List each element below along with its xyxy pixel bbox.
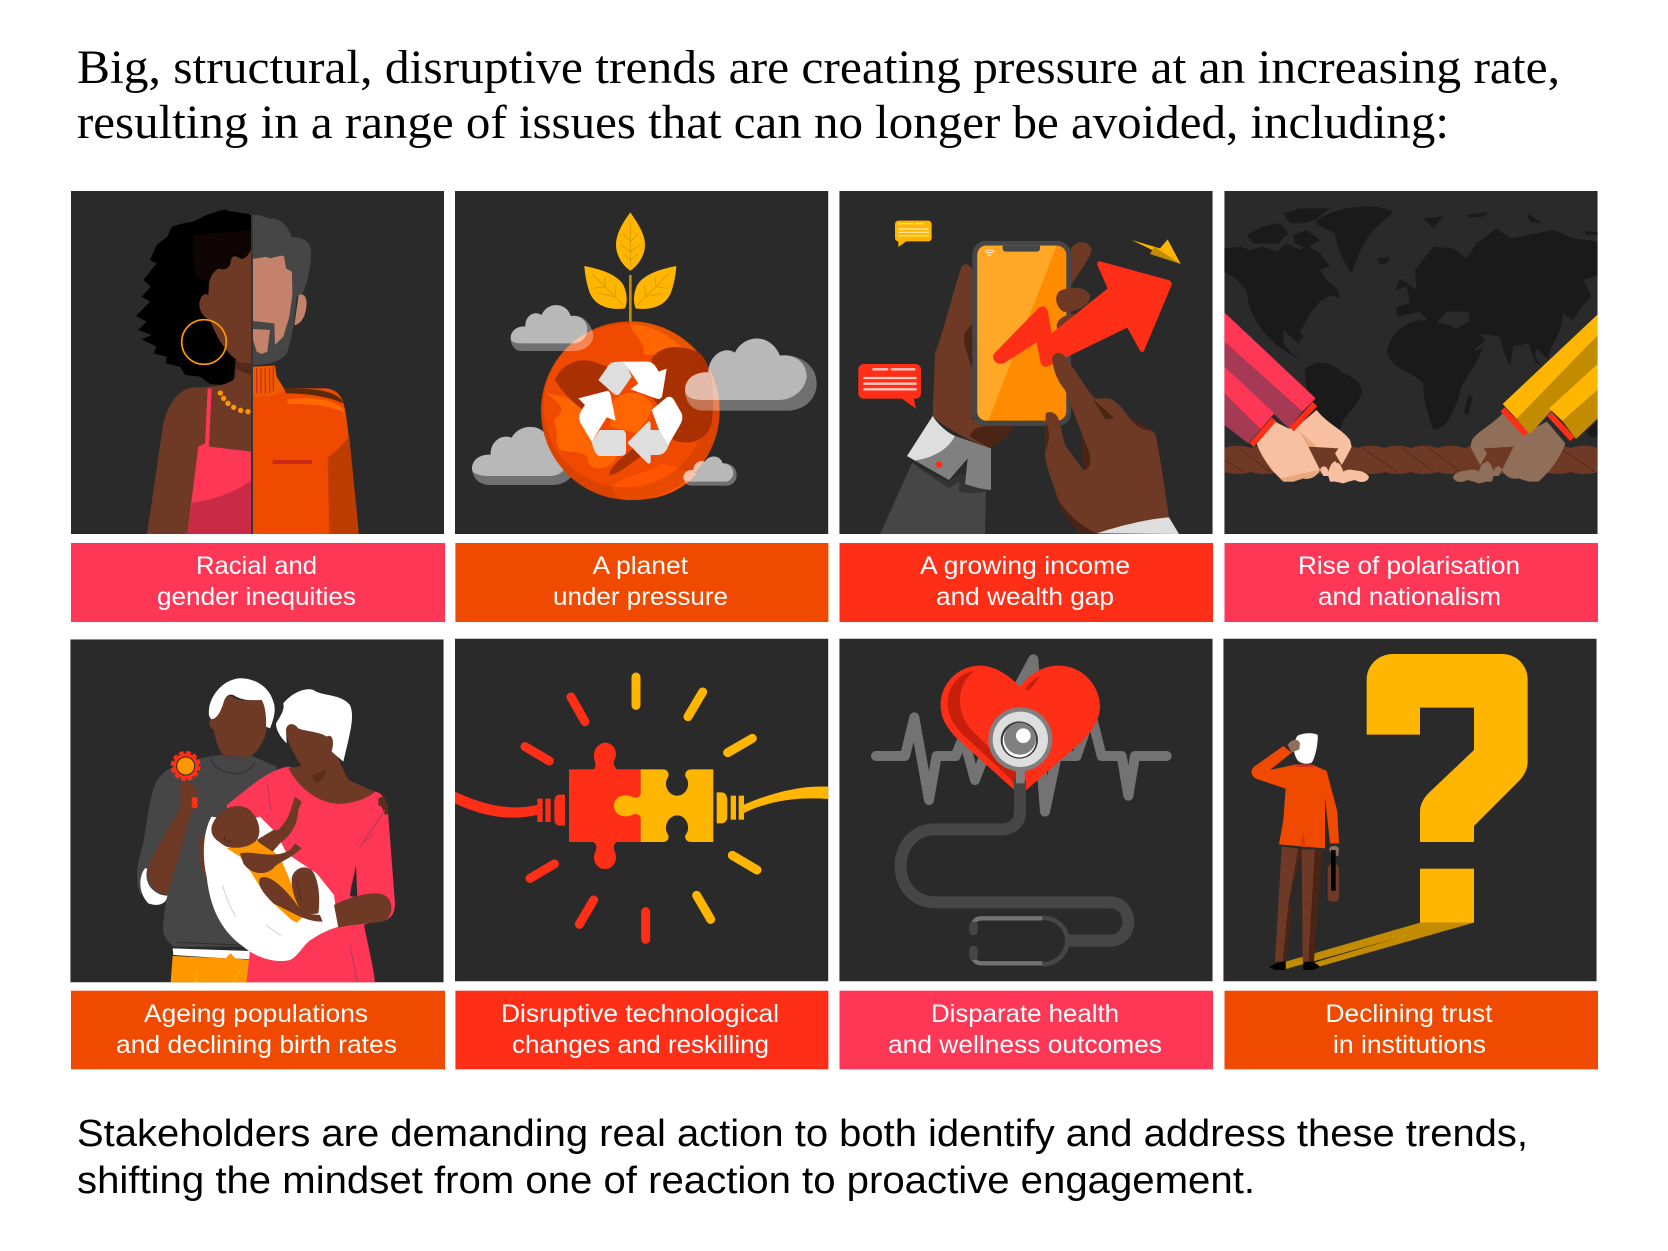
label: disparate health and wellness outcomes <box>840 991 1213 1069</box>
label: a planet under pressure: A planet <box>592 552 688 580</box>
icon: red plug <box>455 792 565 826</box>
label: a planet under pressure <box>455 543 828 622</box>
label: racial and gender inequities <box>71 543 445 622</box>
icon: rising red arrow <box>993 261 1172 367</box>
icon: pink sleeves and left hands <box>1224 312 1369 483</box>
label: ageing populations and declining birth rates <box>71 991 445 1069</box>
icon: heart <box>941 666 1100 791</box>
label: disparate health and wellness outcomes: Disparate health <box>931 1000 1119 1028</box>
icon: shirt cuff and sleeve <box>880 416 991 534</box>
panel: declining trust illustration <box>1223 638 1597 982</box>
icon: yellow puzzle piece <box>614 769 713 842</box>
icon: baby in white wrap <box>204 797 391 961</box>
icon: sprout leaves <box>584 212 676 322</box>
icon: yellow sleeves and right hands <box>1453 314 1598 483</box>
label: a growing income and wealth gap <box>840 543 1213 622</box>
panel: health and wellness illustration <box>839 638 1213 982</box>
label: racial and gender inequities: gender inequities <box>157 583 356 611</box>
label: rise of polarisation and nationalism: and nationalism <box>1318 583 1501 611</box>
icon: question mark <box>1367 654 1528 923</box>
icon: rope <box>1224 446 1598 474</box>
panel: disruptive technology illustration <box>455 638 828 982</box>
icon: cloud lower right <box>683 456 737 486</box>
icon: right hand tapping <box>1045 353 1179 534</box>
icon: man looking up <box>1251 733 1339 970</box>
panel: income and wealth gap illustration <box>839 191 1213 534</box>
icon: stethoscope tube <box>901 770 1128 964</box>
icon: cloud lower left <box>472 427 572 485</box>
icon: woman in pink <box>199 689 395 982</box>
icon: cloud right <box>685 339 817 411</box>
title: Big, structural, disruptive trends are creating pressure at an increasing rate, <box>77 41 1560 94</box>
icon: fingers behind arrow <box>1056 288 1090 330</box>
title <box>77 41 1560 149</box>
label: disruptive technological changes and reskilling: Disruptive technological <box>501 1000 779 1028</box>
label: ageing populations and declining birth rates: Ageing populations <box>144 1000 368 1028</box>
icon: question mark shadow <box>1286 923 1474 969</box>
icon: world map <box>1224 206 1598 443</box>
label: disruptive technological changes and reskilling: changes and reskilling <box>512 1031 769 1059</box>
icon: yellow chat bubble <box>895 221 932 247</box>
icon: stethoscope chest piece <box>988 707 1052 771</box>
label: disparate health and wellness outcomes: and wellness outcomes <box>888 1031 1162 1059</box>
icon: recycle symbol <box>578 362 682 464</box>
label: declining trust in institutions <box>1224 991 1598 1069</box>
icon: burst rays <box>525 677 757 939</box>
label: a growing income and wealth gap: and wealth gap <box>936 583 1114 611</box>
panel: planet under pressure illustration <box>455 191 828 534</box>
icon: globe <box>541 321 720 500</box>
icon: heartbeat line <box>876 659 1167 812</box>
icon: man with rattle <box>137 678 277 982</box>
icon: woman half <box>136 209 252 534</box>
icon: cloud upper left <box>511 305 593 351</box>
title: resulting in a range of issues that can no longer be avoided, including: <box>77 96 1449 149</box>
closing text block: Stakeholders are demanding real action to both identify and address these trends, <box>77 1113 1528 1155</box>
panel: ageing populations illustration <box>70 639 444 982</box>
icon: left hand holding phone <box>933 242 1092 448</box>
icon: paper plane <box>1132 239 1181 264</box>
label: rise of polarisation and nationalism <box>1224 543 1598 622</box>
label: disruptive technological changes and reskilling <box>455 991 828 1069</box>
label: declining trust in institutions: Declining trust <box>1326 1000 1493 1028</box>
panel: polarisation and nationalism illustration <box>1224 191 1598 534</box>
label: ageing populations and declining birth rates: and declining birth rates <box>116 1031 397 1059</box>
label: racial and gender inequities: Racial and <box>196 552 317 580</box>
icon: red puzzle piece <box>569 743 641 869</box>
closing text block <box>77 1113 1528 1202</box>
label: a planet under pressure: under pressure <box>553 583 728 611</box>
label: declining trust in institutions: in institutions <box>1333 1031 1486 1059</box>
icon: man half <box>253 215 359 534</box>
label: a growing income and wealth gap: A growing income <box>920 552 1130 580</box>
icon: yellow plug <box>717 786 828 823</box>
icon: smartphone <box>972 241 1071 426</box>
label: rise of polarisation and nationalism: Rise of polarisation <box>1298 552 1520 580</box>
panel: racial and gender inequities illustration <box>71 191 444 534</box>
closing text block: shifting the mindset from one of reaction to proactive engagement. <box>77 1160 1255 1202</box>
icon: red chat bubble <box>858 364 921 409</box>
